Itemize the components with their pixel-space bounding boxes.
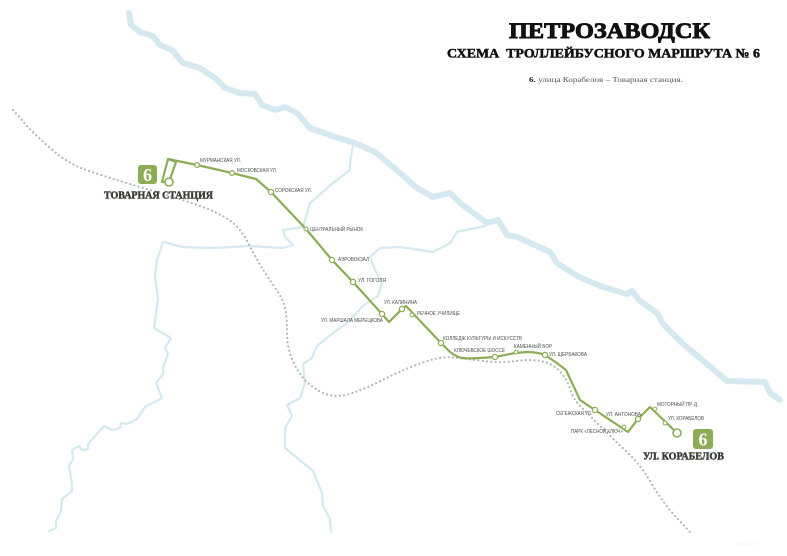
central tributary: [285, 226, 485, 532]
terminus label: east: УЛ. КОРАБЕЛОВ: [643, 452, 724, 462]
stop labels: МОТОРНЫЙ ПР-Д: [657, 400, 697, 408]
stop labels: УЛ. КОРАБЕЛОВ: [668, 416, 704, 422]
stop labels: УЛ. КАЛИНИНА: [384, 300, 417, 306]
stop labels: [200, 158, 704, 435]
stop labels: КЛЮЧЕВСКОЕ ШОССЕ: [454, 348, 505, 354]
trolleybus route 6 terminal loop: [162, 159, 176, 182]
stop labels: УЛ. ЩЕРБАКОВА: [549, 352, 587, 358]
stop labels: АЭРОВОКЗАЛ: [338, 257, 369, 263]
stop labels: КАМЕННЫЙ БОР: [514, 342, 552, 350]
western tributary: [49, 145, 353, 531]
stop labels: УЛ. АНТОНОВА: [606, 412, 641, 418]
route line main: [168, 159, 677, 433]
terminus label: west: ТОВАРНАЯ СТАНЦИЯ: [104, 190, 214, 202]
stops: [165, 163, 681, 437]
badge: route 6 east: 6: [698, 430, 708, 450]
stop labels: ПАРК «ЛЕСНОЙ КЛЮЧ»: [571, 427, 623, 435]
subtitle: СХЕМА ТРОЛЛЕЙБУСНОГО МАРШРУТА № 6: [447, 46, 761, 60]
stop labels: МОСКОВСКАЯ УЛ.: [237, 168, 277, 174]
badge: route 6 west: 6: [143, 165, 152, 185]
badge: route 6 east: [693, 429, 713, 450]
stop labels: МУРМАНСКАЯ УЛ.: [200, 158, 241, 164]
stop labels: УЛ. МАРШАЛА МЕРЕЦКОВА: [321, 318, 383, 324]
route description: 6. улица Корабелов – Товарная станция.: [529, 76, 683, 84]
stop labels: СЕГЕЖСКАЯ УЛ.: [556, 411, 592, 417]
stop labels: РЕЧНОЕ УЧИЛИЩЕ: [417, 311, 460, 317]
stop labels: КОЛЛЕДЖ КУЛЬТУРЫ И ИСКУССТВ: [443, 336, 522, 342]
stop labels: ЦЕНТРАЛЬНЫЙ РЫНОК: [310, 225, 364, 233]
railway line: [13, 110, 690, 532]
title: ПЕТРОЗАВОДСК: [509, 18, 710, 43]
badge: route 6 west: [138, 165, 157, 185]
stop labels: УЛ. ГОГОЛЯ: [358, 278, 386, 284]
stop labels: СОРОКСКАЯ УЛ.: [275, 188, 312, 194]
watermark: 2017 год ©: [735, 540, 758, 546]
main river: [129, 13, 780, 400]
